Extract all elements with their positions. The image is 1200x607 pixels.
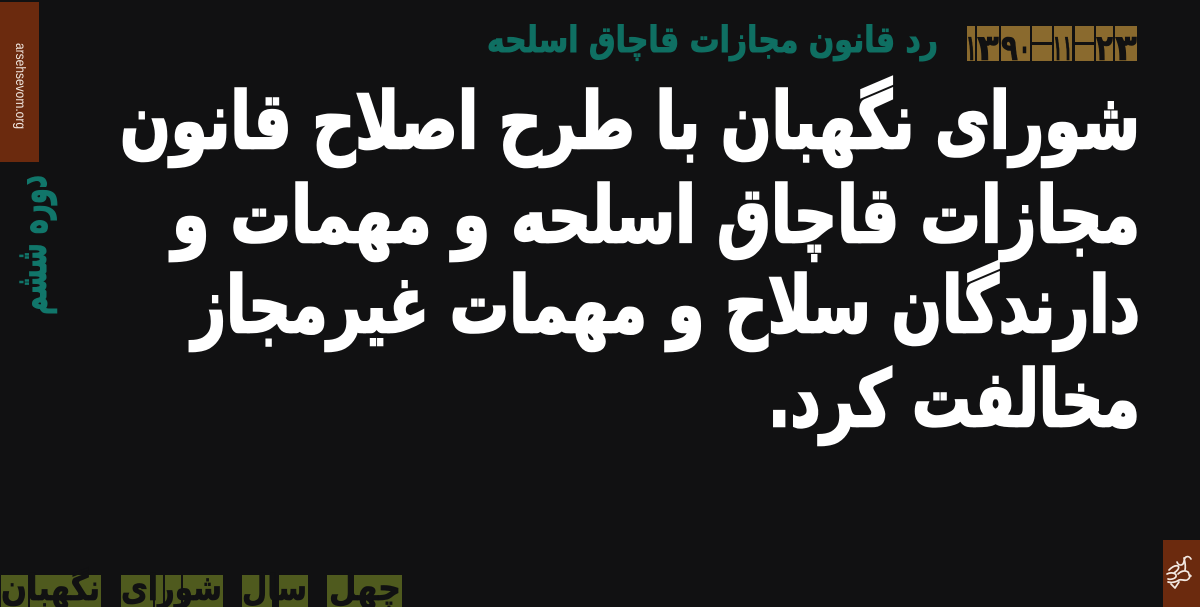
date badge: ۰ — [1019, 28, 1030, 69]
headline — [120, 77, 1140, 445]
date badge: ۱ — [1063, 28, 1072, 69]
logo tab — [1163, 540, 1200, 607]
date badge: ۳ — [977, 28, 999, 69]
side tab: website: arsehsevom.org — [13, 43, 29, 129]
vertical label: term: دوره ششم — [6, 175, 57, 315]
date badge: ۲ — [1096, 28, 1113, 69]
date badge: ۱ — [966, 28, 976, 69]
date badge: ۹ — [1001, 28, 1018, 69]
footer banner — [1, 567, 402, 607]
side tab: website — [0, 2, 39, 162]
date badge: ۳ — [1115, 28, 1137, 69]
icon: calligraphic logo — [1167, 557, 1191, 588]
date badge: ۱ — [1053, 28, 1062, 69]
date badge — [966, 26, 1137, 69]
subtitle: رد قانون مجازات قاچاق اسلحه — [487, 20, 938, 61]
